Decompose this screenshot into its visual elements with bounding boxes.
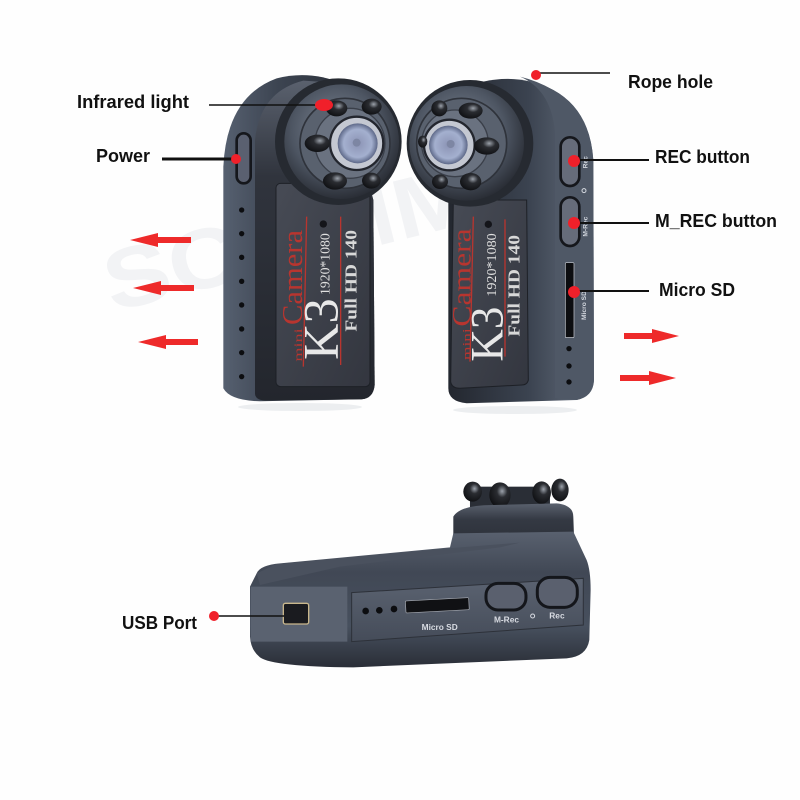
label: M_REC button	[568, 211, 777, 231]
bottom camera printed labels	[422, 611, 565, 632]
label: Rope hole	[531, 70, 713, 92]
label: Micro SD: Micro SD	[659, 280, 735, 300]
right arrows	[620, 329, 679, 385]
label: Infrared light	[77, 92, 333, 112]
left camera LEDs	[305, 99, 382, 190]
bottom camera buttons	[486, 577, 577, 610]
left camera body	[223, 75, 375, 401]
left camera label plate: mini	[293, 328, 305, 362]
left arrows	[130, 233, 198, 349]
label: Power	[96, 146, 241, 166]
bottom camera top edge	[257, 543, 520, 585]
right camera LEDs	[418, 100, 499, 190]
bottom camera printed labels: Rec	[549, 611, 565, 621]
left power button	[237, 133, 251, 183]
bottom camera	[250, 479, 591, 667]
left camera label plate: Full HD 140	[342, 230, 361, 332]
right camera SD slot	[565, 263, 574, 338]
bottom camera LEDs	[463, 479, 569, 510]
label: USB Port: USB Port	[122, 613, 197, 633]
left camera front shell	[255, 81, 375, 401]
right camera label plate	[447, 200, 528, 388]
right camera printed labels: M-Rec	[582, 216, 589, 237]
right camera printed labels	[581, 156, 589, 320]
label: Micro SD	[568, 280, 735, 300]
label: REC button	[568, 147, 750, 167]
right camera label plate: Full HD 140	[504, 235, 523, 337]
right camera side panel	[520, 77, 594, 400]
label: M_REC button: M_REC button	[655, 211, 777, 231]
right camera	[407, 77, 594, 403]
watermark: SCOMM	[94, 146, 485, 330]
bottom camera lens housing	[453, 503, 574, 550]
right camera label plate: 1920*1080	[484, 233, 499, 297]
bottom camera printed labels: Micro SD	[422, 622, 458, 632]
right camera label plate: mini	[462, 328, 474, 360]
left camera label plate: Camera	[278, 229, 309, 325]
bottom camera body	[250, 532, 591, 667]
label: USB Port	[122, 611, 284, 633]
right camera vent holes	[566, 346, 572, 385]
bottom camera vent holes	[362, 606, 397, 614]
left camera label plate: K3	[292, 298, 348, 360]
bottom camera side panel	[352, 578, 583, 642]
left camera lens housing	[275, 78, 402, 205]
label: Rope hole: Rope hole	[628, 72, 713, 92]
left camera label plate	[276, 183, 370, 387]
bottom camera printed labels: M-Rec	[494, 614, 519, 624]
left camera label plate: 1920*1080	[317, 233, 332, 295]
right camera body	[448, 79, 594, 403]
label: REC button: REC button	[655, 147, 750, 167]
bottom camera end panel	[251, 587, 347, 642]
USB port	[283, 603, 309, 624]
left camera vent holes	[239, 207, 244, 379]
right camera printed labels: Rec	[582, 156, 589, 168]
right camera label plate: K3	[462, 307, 514, 362]
right camera lens housing	[407, 80, 533, 207]
right camera buttons	[561, 137, 579, 246]
label: Power: Power	[96, 146, 150, 166]
right camera label plate: Camera	[447, 228, 477, 327]
left camera	[223, 75, 402, 401]
label: Infrared light: Infrared light	[77, 92, 189, 112]
bottom camera SD slot	[405, 598, 469, 613]
right camera printed labels: Micro SD	[581, 291, 588, 320]
camera reflections	[238, 403, 577, 414]
